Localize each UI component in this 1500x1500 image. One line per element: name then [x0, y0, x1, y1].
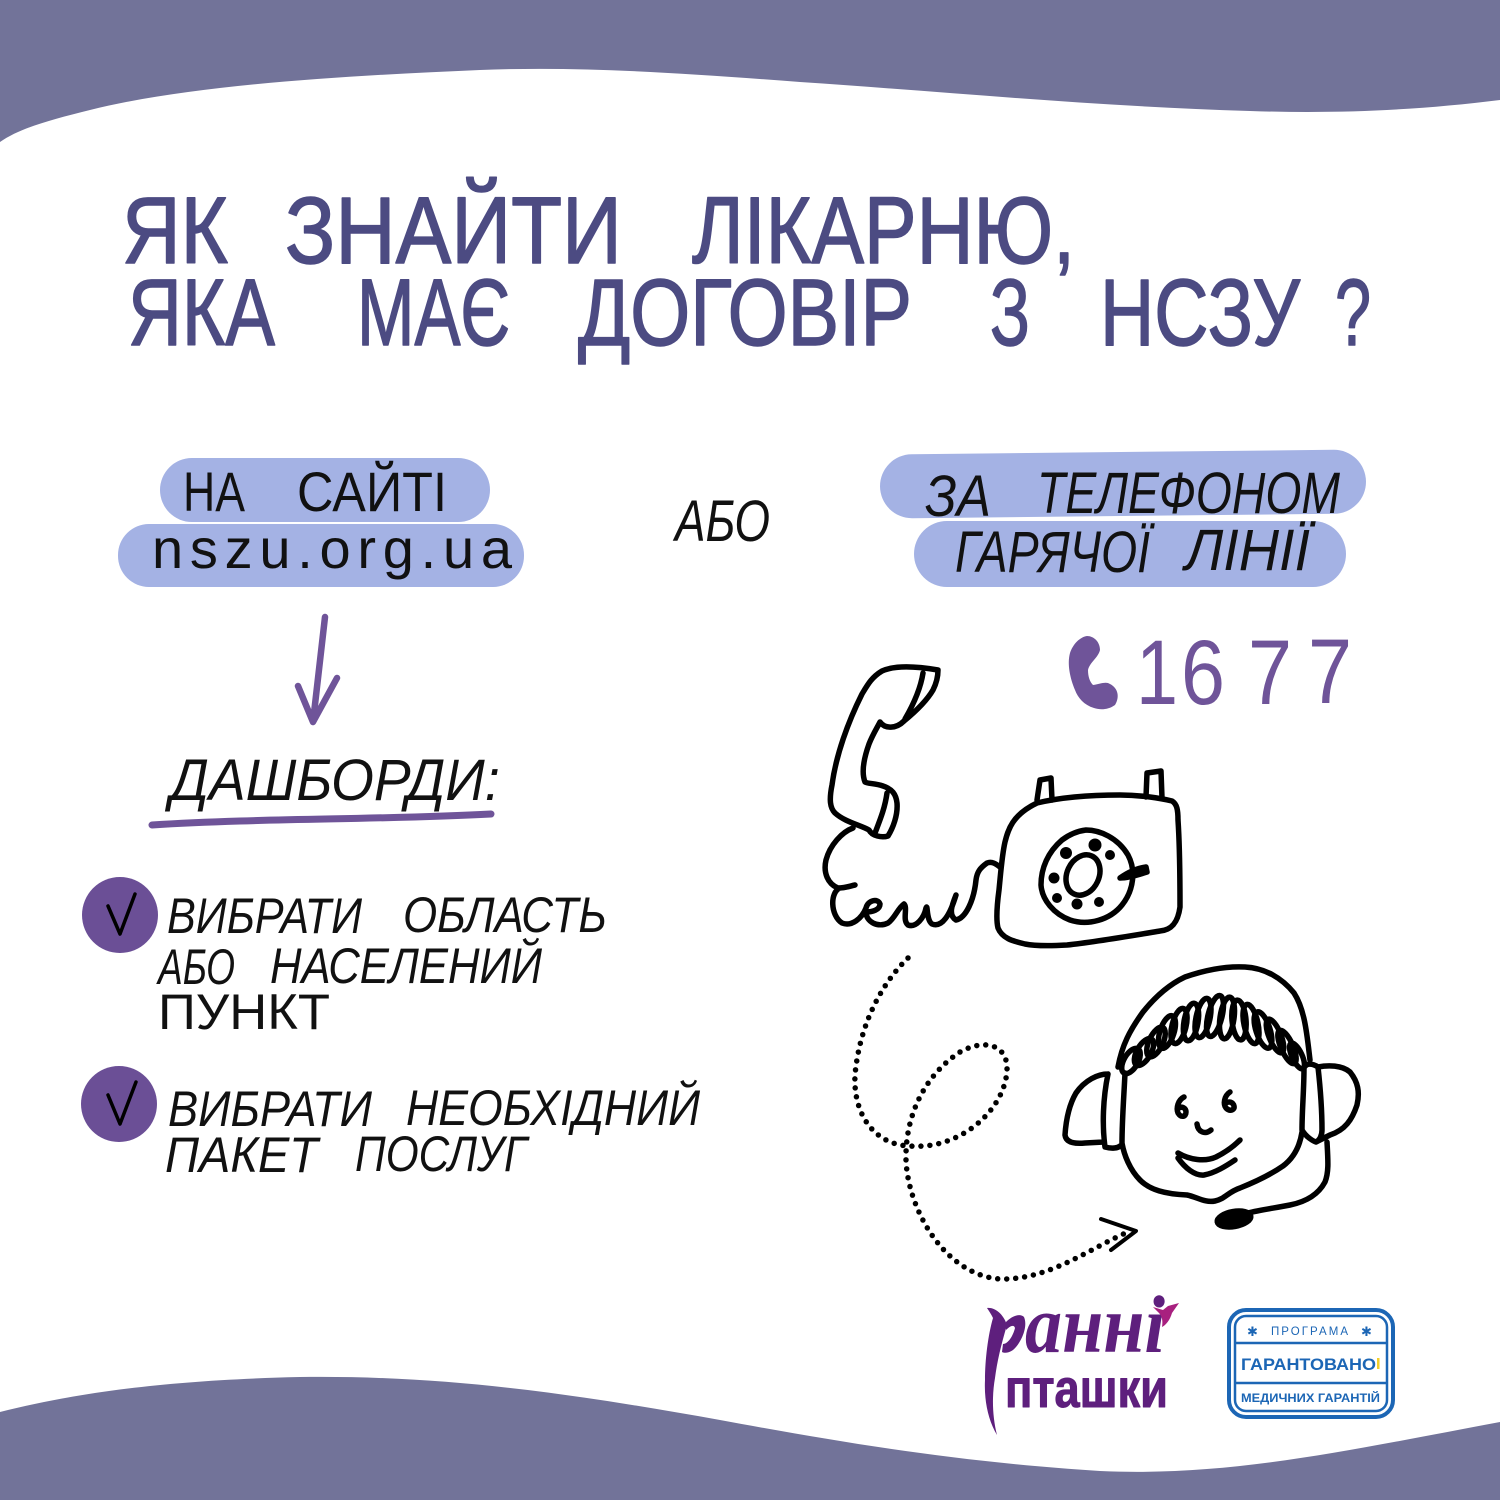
title: З — [990, 260, 1030, 366]
stamp inner frame — [1235, 1316, 1387, 1411]
icon: operator with headset — [1065, 967, 1358, 1229]
stamp outer frame — [1229, 1310, 1393, 1417]
top wave band — [0, 0, 1500, 142]
hotline number with phone icon — [1069, 621, 1352, 724]
item text — [165, 1080, 700, 1183]
website label — [183, 460, 447, 523]
title: ЯК — [122, 178, 228, 284]
item text — [156, 887, 607, 1040]
title: НСЗУ — [1100, 260, 1301, 366]
icon: check badge — [81, 1066, 157, 1142]
item text: ПУНКТ — [158, 984, 330, 1040]
stamp ornament right: ✱ — [1361, 1324, 1372, 1339]
logo word ранні remainder: анні — [1025, 1279, 1165, 1370]
icon: check badge — [82, 877, 158, 953]
title: ДОГОВІР — [578, 260, 912, 366]
nose — [1197, 1124, 1211, 1132]
icon: phone receiver — [1069, 636, 1118, 709]
hotline label: ЛІНІЇ — [1181, 518, 1317, 583]
item text: ВИБРАТИ — [168, 1081, 372, 1137]
item text: ОБЛАСТЬ — [403, 887, 607, 943]
headband — [1118, 967, 1310, 1067]
item text: АБО — [156, 939, 235, 995]
phone label: ЗА — [925, 464, 991, 529]
item text: ПАКЕТ — [165, 1127, 321, 1183]
headset microphone — [1248, 1142, 1328, 1213]
stamp top line: ПРОГРАМА — [1271, 1326, 1349, 1338]
stamp exclamation mark — [1377, 1358, 1380, 1369]
logo bird — [1153, 1303, 1179, 1327]
title: ЯКА — [128, 260, 275, 366]
curly hair — [1118, 994, 1307, 1077]
number: 1 — [1136, 622, 1178, 724]
telephone feet — [1037, 771, 1162, 800]
arrow down to dashboards — [298, 617, 337, 722]
number — [1136, 621, 1352, 724]
connector word: or: АБО — [673, 489, 770, 554]
dial holes — [1048, 838, 1115, 910]
right ear cup — [1302, 1064, 1358, 1142]
rotary dial — [1041, 830, 1133, 922]
number: 7 — [1248, 622, 1292, 724]
stamp ornament left: ✱ — [1247, 1324, 1258, 1339]
hotline label: ГАРЯЧОЇ — [955, 520, 1156, 585]
item text: ПОСЛУГ — [355, 1126, 530, 1182]
right highlighted heading: by hotline phone — [880, 449, 1366, 587]
dotted route — [855, 958, 1128, 1279]
logo: Ранні пташки — [985, 1279, 1179, 1435]
website label: НА — [183, 460, 246, 523]
stamp: Програма медичних гарантій — [1229, 1310, 1393, 1417]
arrow head — [1101, 1219, 1136, 1250]
logo letter р — [985, 1308, 1025, 1435]
heading text: ДАШБОРДИ: — [164, 748, 500, 813]
bottom wave band — [0, 1377, 1500, 1500]
left ear cup — [1065, 1074, 1120, 1148]
title — [122, 177, 1371, 366]
highlight pill: website address — [118, 524, 524, 587]
number: 6 — [1181, 622, 1225, 724]
phone label: ТЕЛЕФОНОМ — [1037, 461, 1341, 526]
coiled cord — [825, 828, 1000, 926]
microphone tip — [1216, 1209, 1252, 1229]
hotline label — [955, 518, 1317, 585]
highlight pill: website label — [160, 458, 490, 522]
checklist item 1 — [82, 877, 607, 1040]
left highlighted heading: on the website — [118, 458, 524, 587]
item text: НЕОБХІДНИЙ — [406, 1080, 700, 1136]
website label: САЙТІ — [297, 460, 447, 523]
title: МАЄ — [357, 260, 510, 366]
telephone body — [997, 795, 1180, 946]
highlight pill: by phone — [880, 449, 1366, 519]
smile — [1178, 1140, 1240, 1175]
eyes — [1177, 1092, 1234, 1116]
face outline — [1122, 1073, 1302, 1201]
title: ЛІКАРНЮ, — [692, 178, 1075, 284]
checklist item 2 — [81, 1066, 700, 1183]
dial stopper — [1120, 867, 1147, 878]
heading underline — [152, 814, 491, 825]
number: 7 — [1308, 621, 1352, 723]
website address: nszu.org.ua — [152, 517, 513, 580]
stamp main word: ГАРАНТОВАНО — [1241, 1356, 1376, 1374]
dotted arrow from telephone to operator — [855, 958, 1136, 1279]
highlight pill: hotline — [914, 521, 1346, 587]
dial centre ring — [1060, 849, 1106, 901]
stamp divider lines — [1235, 1343, 1387, 1383]
handset — [830, 667, 938, 837]
icon: rotary telephone — [825, 667, 1180, 946]
stamp bottom line: МЕДИЧНИХ ГАРАНТІЙ — [1241, 1390, 1380, 1405]
item text: ВИБРАТИ — [167, 888, 362, 944]
item text: НАСЕЛЕНИЙ — [270, 938, 542, 994]
logo word пташки: пташки — [1005, 1359, 1168, 1419]
title: ЗНАЙТИ — [285, 177, 622, 284]
title: ? — [1335, 260, 1371, 366]
phone label — [925, 461, 1341, 529]
dashboards heading — [152, 748, 500, 825]
